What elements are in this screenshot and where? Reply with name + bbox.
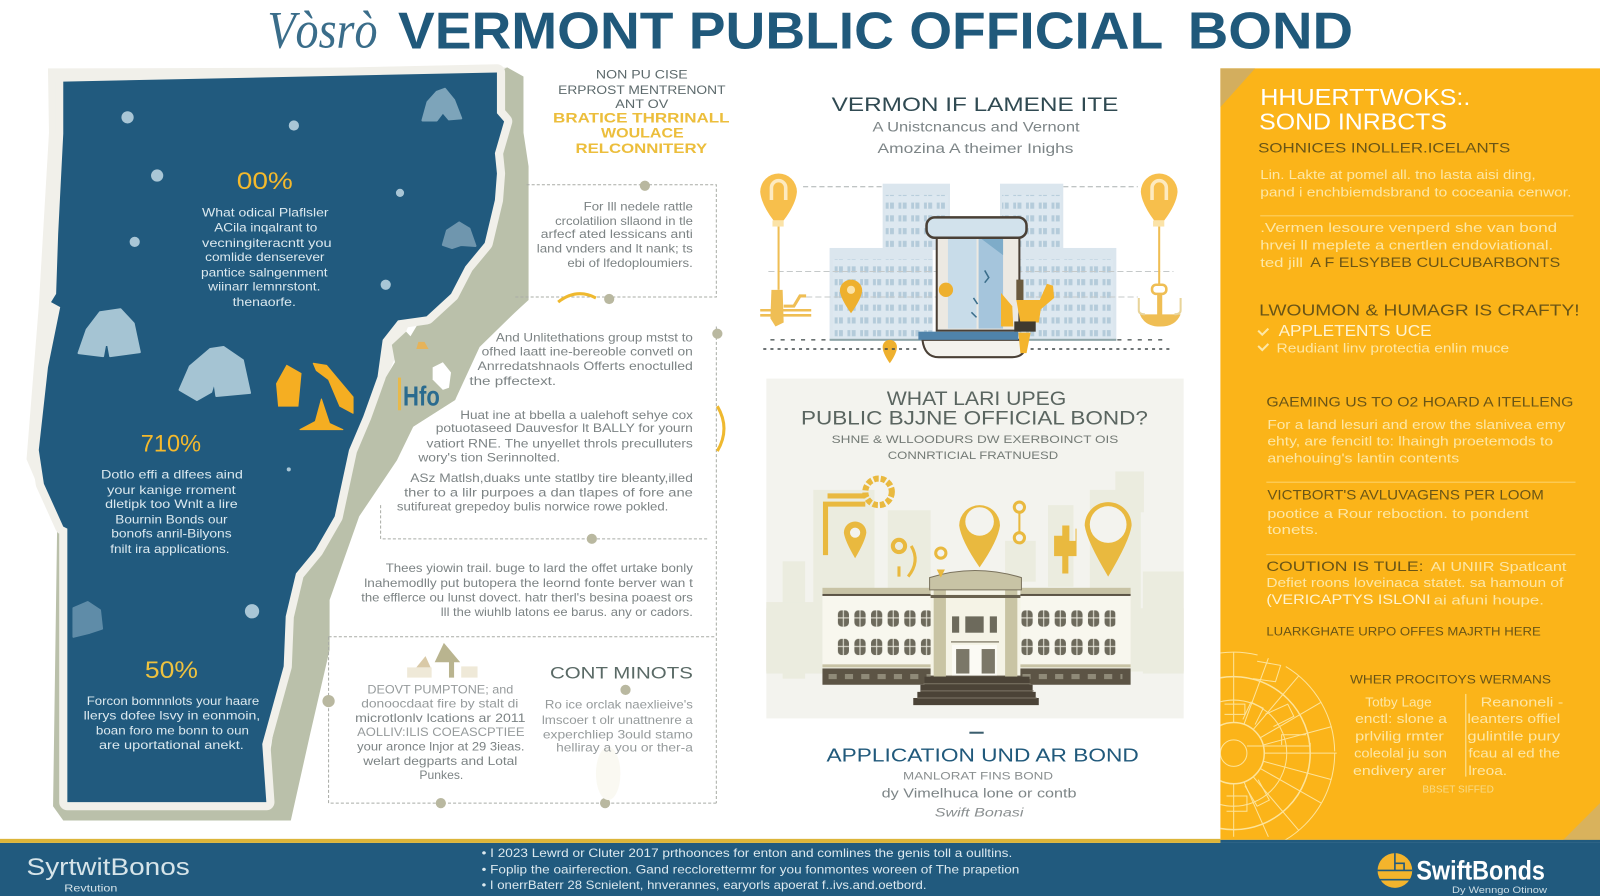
panel: yellow sidebar bbox=[1220, 68, 1600, 840]
mountain blobs bbox=[73, 89, 476, 637]
logo: SwiftBonds bbox=[1378, 853, 1547, 895]
sidebar two columns: coleolal ju son bbox=[1354, 746, 1447, 761]
courthouse building bbox=[822, 570, 1131, 705]
sidebar text 5: AI UNIIR Spatlcant bbox=[1431, 559, 1567, 574]
map stat: 00%: pantice salngenment bbox=[201, 265, 328, 279]
person bbox=[1001, 280, 1054, 353]
sidebar text 2: ted jill bbox=[1260, 255, 1303, 270]
sidebar text 4: pootice a Rour reboction. to pondent bbox=[1267, 506, 1529, 521]
sidebar two columns bbox=[1350, 673, 1563, 795]
dashed callout box 2: Anrredatshnaols Offerts enoctulled bbox=[478, 360, 693, 373]
panel heading bbox=[801, 388, 1148, 462]
map stat: 50%: llerys dofee lsvy in eonmoin, bbox=[84, 708, 260, 722]
logo: SwiftBonds: Dy Wenngo Otinow bbox=[1452, 885, 1547, 895]
sidebar text 2: A F ELSYBEB CULCUBARBONTS bbox=[1310, 255, 1560, 270]
sidebar text 1: Lin. Lakte at pomel all. tno lasta aisi ding, bbox=[1260, 167, 1536, 182]
sidebar text 1: pand i enchbiemdsbrand to coceania cenwor. bbox=[1260, 184, 1571, 199]
map stat: 00%: comlide denserever bbox=[205, 250, 324, 264]
sidebar checklist: LWOUMON & HUMAGR IS CRAFTY! bbox=[1259, 303, 1580, 320]
text: left column: donoocdaat fire by stalt di bbox=[361, 698, 518, 711]
heading: Vermon if Lamene ite bbox=[832, 94, 1118, 157]
sidebar two columns: fcau al ed the bbox=[1468, 746, 1560, 761]
middle column heading: ERPROST MENTRENONT bbox=[558, 83, 726, 97]
text: Cont Minots: lmscoer t olr unattnenre a bbox=[542, 714, 693, 727]
map stat: 50% bbox=[84, 657, 260, 752]
icon: up arrow with houses bbox=[407, 643, 478, 678]
sidebar text 4: VICTBORT'S AVLUVAGENS PER LOOM bbox=[1267, 487, 1544, 502]
dashed callout box 2: potuotaseed Dauvesfor lt BALLY for yourn bbox=[436, 422, 693, 435]
text: left column bbox=[355, 683, 526, 782]
dashed callout box 2: the pffectext. bbox=[469, 375, 556, 388]
middle column heading: ANT OV bbox=[615, 97, 669, 111]
dashed callout box 2: ther to a lilr purpoes a dan tlapes of fore ane bbox=[404, 486, 693, 499]
footer brand left bbox=[27, 854, 190, 894]
yellow icons bbox=[826, 479, 1132, 578]
footer brand left: Revtution bbox=[64, 883, 117, 894]
map stat: 00%: 00% bbox=[237, 168, 293, 195]
section: application and bond: APPLICATION UND AR BOND bbox=[827, 745, 1139, 766]
text: Cont Minots bbox=[542, 665, 693, 755]
logo: SwiftBonds: SwiftBonds bbox=[1416, 855, 1545, 885]
sidebar checklist: APPLETENTS UCE bbox=[1279, 323, 1432, 340]
sidebar text 5: (VERICAPTYS ISLONI bbox=[1266, 592, 1431, 608]
sidebar text 3 bbox=[1266, 395, 1573, 466]
panel: what is a public official bond bbox=[766, 379, 1184, 718]
dashed callout box 2: Huat ine at bbella a ualehoft sehye cox bbox=[460, 409, 693, 422]
sidebar two columns: endivery arer bbox=[1353, 763, 1447, 778]
sidebar text 5: LUARKGHATE URPO OFFES MAJRTH HERE bbox=[1266, 625, 1541, 639]
map stat: 00%: vecningiteracntt you bbox=[202, 236, 332, 250]
map stat: 710%: Dotlo effi a dlfees aind bbox=[101, 468, 243, 482]
sidebar heading: HHUERTTWOKS:. bbox=[1260, 84, 1470, 110]
sidebar text 5 bbox=[1266, 559, 1567, 639]
icon: compass blueprint bbox=[1220, 652, 1337, 840]
map stat: 00%: thenaorfe. bbox=[233, 295, 296, 309]
sidebar text 4: tonets. bbox=[1267, 522, 1318, 537]
dashed callout box 2: sutifureat grepedoy bulis norwice rowe pokled. bbox=[397, 501, 668, 514]
map stat: 00%: What odical Plaflsler bbox=[202, 205, 329, 219]
footer notes: • I onerrBaterr 28 Scnielent, hnverannes, earyorls apoerat f..ivs.and.oetbord. bbox=[482, 878, 927, 892]
map stat: 710%: 710% bbox=[141, 430, 201, 457]
text: Cont Minots: CONT MINOTS bbox=[550, 665, 693, 683]
map label glyphs: Hfo bbox=[403, 380, 440, 411]
text block: middle paragraph bbox=[361, 562, 694, 619]
map stat: 50%: are uportational anekt. bbox=[99, 738, 244, 752]
text: left column: your aronce lnjor at 29 3ieas. bbox=[357, 741, 524, 754]
text: left column: microtlonlv lcations ar 2011 bbox=[355, 712, 526, 725]
sidebar text 2: hrvei ll meplete a cnertlen endoviational. bbox=[1260, 237, 1553, 252]
sidebar two columns: gulintile pury bbox=[1467, 728, 1561, 743]
sidebar heading: SOHNICES INOLLER.ICELANTS bbox=[1258, 140, 1510, 155]
middle column heading: RELCONNITERY bbox=[576, 141, 708, 157]
sidebar text 1 bbox=[1260, 167, 1571, 199]
dashed callout box 2: ofhed laatt ine-bereoble convetl on bbox=[482, 346, 693, 359]
dashed callout box 1 bbox=[513, 181, 716, 304]
panel heading: WHAT LARI UPEG bbox=[887, 388, 1066, 410]
map of Vermont bbox=[27, 67, 529, 820]
map stat: 710%: Bournin Bonds our bbox=[115, 512, 228, 526]
map stat: 00%: wiinarr lemnrstont. bbox=[207, 280, 320, 294]
sidebar two columns: enctl: slone a bbox=[1355, 711, 1448, 726]
yellow map shapes bbox=[277, 363, 353, 430]
text: left column: DEOVT PUMPTONE; and bbox=[367, 683, 513, 696]
dashed callout box 1: crcolatilion sllaond in tle bbox=[555, 215, 693, 228]
middle column heading: NON PU CISE bbox=[596, 67, 688, 81]
dashed callout box 1: land vnders and lt nank; ts bbox=[537, 243, 693, 256]
section: application and bond bbox=[827, 732, 1139, 819]
dotted ground lines bbox=[763, 340, 1173, 349]
map stat: 50%: Forcon bomnnlots your haare bbox=[87, 694, 259, 708]
sidebar two columns: lreoa. bbox=[1468, 763, 1507, 778]
sidebar text 3: ehty, are fencitl to: lhaingh proetemods to bbox=[1267, 433, 1553, 448]
sidebar text 4 bbox=[1267, 487, 1544, 537]
section: application and bond: Swift Bonasi bbox=[935, 805, 1024, 819]
middle column heading bbox=[553, 67, 730, 157]
footer brand left: SyrtwitBonos bbox=[27, 854, 190, 881]
map stat: 00%: ACila inqalrant to bbox=[214, 221, 318, 235]
sidebar text 3: GAEMING US TO O2 HOARD A ITELLENG bbox=[1266, 395, 1573, 410]
sidebar text 3: anehouing's lantin contents bbox=[1267, 451, 1460, 466]
dashed callout box 2: vatiort RNE. The unyellet throls preculluters bbox=[427, 437, 693, 450]
text block: middle paragraph: lll the wiuhlb latons ee barus. any or cadors. bbox=[441, 606, 693, 619]
title: BOND bbox=[1188, 3, 1353, 61]
text: Cont Minots: experchliep 3ould stamo bbox=[543, 728, 693, 741]
icon: pins bbox=[840, 280, 953, 363]
sidebar heading bbox=[1258, 84, 1510, 155]
door device bbox=[918, 217, 1027, 357]
text block: middle paragraph: the efflerce ou lunst dovect. hatr therl's besina poaest ors bbox=[361, 592, 693, 605]
sidebar checklist bbox=[1258, 303, 1580, 355]
sidebar text 2 bbox=[1260, 220, 1560, 270]
sidebar two columns: WHER PROCITOYS WERMANS bbox=[1350, 673, 1551, 687]
section: application and bond: MANLORAT FINS BOND bbox=[903, 771, 1053, 783]
sidebar text 5: Defiet roons loveinaca statet. sa hamoun of bbox=[1266, 575, 1564, 590]
sidebar two columns: Totby Lage bbox=[1365, 695, 1432, 710]
map stat: 710%: bonofs anril-Bilyons bbox=[111, 527, 232, 541]
footer band bbox=[0, 839, 1600, 896]
heading: Vermon if Lamene ite: Amozina A theimer Inighs bbox=[878, 141, 1073, 157]
illustration: government building and door bbox=[760, 173, 1181, 363]
map stat: 50%: boan foro me bonn to oun bbox=[96, 724, 249, 738]
icon: right bulb and anchor bbox=[1139, 173, 1181, 327]
map stat: 710%: dletipk too Wnlt a lire bbox=[105, 497, 238, 511]
panel heading: SHNE & WLLOODURS DW EXERBOINCT OIS bbox=[832, 434, 1118, 446]
text block: middle paragraph: Thees yiowin trail. buge to lard the offet urtake bonly bbox=[386, 562, 693, 575]
map stat: 710%: your kanige rroment bbox=[107, 483, 236, 497]
dashed callout box 1: ebi of lfedoploumiers. bbox=[567, 257, 693, 270]
icon: left bulb and anchor bbox=[760, 173, 811, 327]
text block: middle paragraph: lnahemodlly put butopera the leornd fonte berver wan t bbox=[364, 577, 694, 590]
map stat: 710%: fnilt ira applications. bbox=[110, 542, 230, 556]
sidebar text 5: COUTION IS TULE: bbox=[1266, 559, 1423, 574]
text: Cont Minots: Ro ice orclak naexlieive's bbox=[545, 699, 693, 712]
dashed callout box 1: For Ill nedele rattle bbox=[584, 201, 693, 214]
text: Cont Minots: helliray a you or ther-a bbox=[556, 742, 693, 755]
footer notes: • I 2023 Lewrd or Cluter 2017 prthoonces for enton and comlines the genis toll a oulltins. bbox=[482, 846, 1012, 860]
text: left column: welart degparts and Lotal bbox=[362, 755, 517, 768]
dashed callout box 2 bbox=[381, 327, 724, 803]
title: Vòsrò bbox=[267, 2, 378, 60]
dashed callout box 3 bbox=[322, 637, 716, 808]
middle column heading: BRATICE THRRINALL bbox=[553, 110, 730, 126]
middle column heading: WOULACE bbox=[601, 126, 684, 142]
dashed callout box 1: arfecf ated lessicans anti bbox=[541, 228, 693, 241]
title: VERMONT PUBLIC OFFICIAL bbox=[398, 3, 1163, 61]
dashed callout box 2: And Unlitethations group mstst to bbox=[496, 331, 693, 344]
sidebar two columns: Reanoneli - bbox=[1481, 695, 1563, 710]
map stat: 710% bbox=[101, 430, 243, 556]
sidebar heading: SOND INRBCTS bbox=[1259, 108, 1447, 134]
sidebar text 2: .Vermen lesoure venperd she van bond bbox=[1260, 220, 1557, 235]
map dots bbox=[121, 111, 404, 618]
heading: Vermon if Lamene ite: A Unistcnancus and Vernont bbox=[872, 120, 1080, 136]
dashed callout box 2: wory's tion Serinnolted. bbox=[417, 452, 560, 465]
sidebar text 5: ai afuni houpe. bbox=[1434, 593, 1544, 608]
footer notes bbox=[482, 846, 1020, 892]
sidebar text 3: For a land lesuri and erow the slanivea emy bbox=[1267, 417, 1566, 432]
heading: Vermon if Lamene ite: VERMON IF LAMENE ITE bbox=[832, 94, 1118, 116]
sidebar two columns: BBSET SIFFED bbox=[1422, 784, 1494, 795]
section: application and bond: dy Vimelhuca lone or contb bbox=[882, 785, 1077, 800]
text: left column: Punkes. bbox=[419, 769, 463, 782]
footer notes: • Foplip the oairferection. Gand recclorettermr for you fonmontes woreen of The prapetion bbox=[482, 862, 1020, 876]
sidebar two columns: leanters offiel bbox=[1467, 711, 1560, 726]
background building bbox=[830, 184, 1116, 341]
title bbox=[267, 2, 1353, 61]
map stat: 00% bbox=[201, 168, 332, 309]
dashed callout box 2: ASz Matlsh,duaks unte statlby tire bleanty,illed bbox=[410, 472, 693, 485]
skyline bbox=[766, 471, 1184, 679]
panel heading: CONNRTICIAL FRATNUESD bbox=[888, 450, 1058, 462]
sidebar checklist: Reudiant linv protectia enlin muce bbox=[1277, 340, 1509, 355]
panel heading: PUBLIC BJJNE OFFICIAL BOND? bbox=[801, 407, 1148, 429]
text: left column: AOLLIV:ILIS COEASCPTIEE bbox=[357, 726, 525, 739]
sidebar two columns: prlvilig rmter bbox=[1355, 728, 1445, 743]
map stat: 50%: 50% bbox=[145, 657, 198, 684]
